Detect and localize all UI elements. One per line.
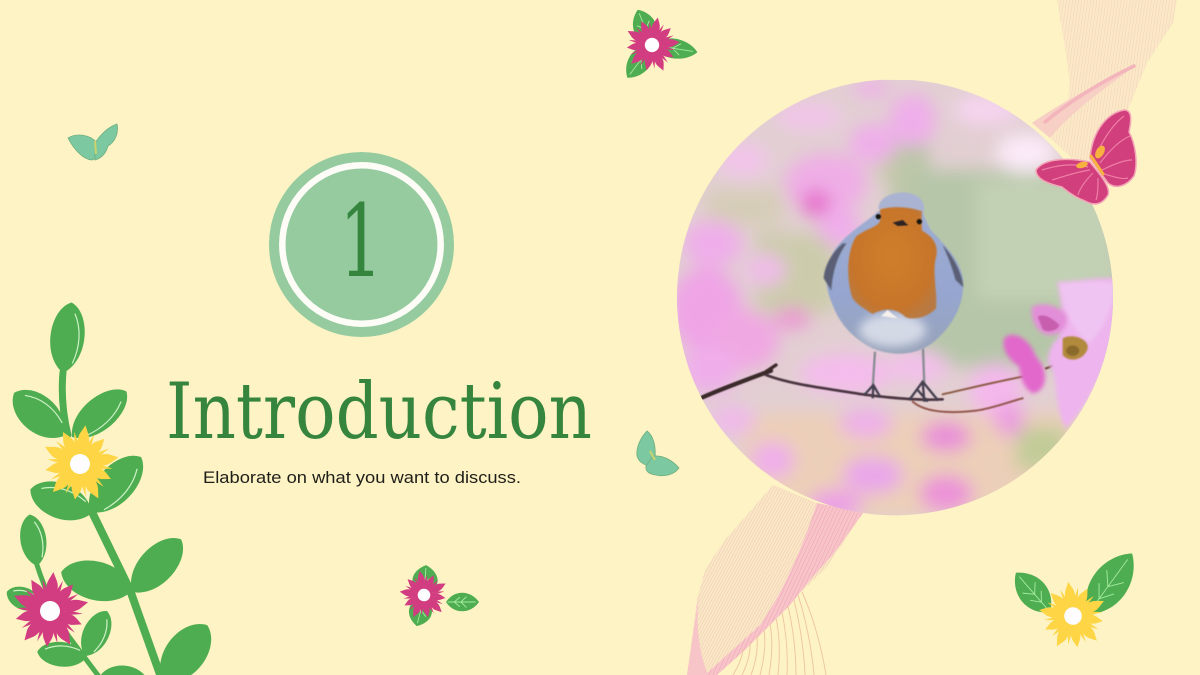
green butterfly center <box>637 431 679 476</box>
leaves <box>46 300 89 375</box>
eyes and beak <box>876 214 922 226</box>
yellow flower <box>37 420 124 505</box>
badge: section number: 1 <box>339 185 383 301</box>
lower right yellow flower <box>1005 543 1147 652</box>
pale belly <box>859 313 926 347</box>
subtitle: Elaborate on what you want to discuss. <box>203 468 521 487</box>
white chest fleck <box>881 310 898 318</box>
top ribbon wave <box>1032 0 1177 175</box>
badge: section number <box>269 152 454 337</box>
photo background <box>676 80 1116 517</box>
robin <box>824 193 963 402</box>
orange breast <box>848 207 937 318</box>
fan lines <box>733 592 826 675</box>
top pink flower <box>619 5 699 84</box>
pink flower <box>8 569 92 650</box>
twigs <box>700 362 1053 414</box>
wing shadows <box>824 243 847 291</box>
bottom ribbon wave <box>687 485 863 675</box>
stems <box>37 372 162 675</box>
photo: robin on a branch <box>669 80 1123 517</box>
pink blossom foreground <box>1004 278 1116 428</box>
legs <box>864 348 938 402</box>
left flowering plant <box>2 300 223 675</box>
title: Introduction <box>166 367 592 457</box>
body <box>824 193 963 354</box>
blurred blossoms <box>669 80 1056 517</box>
green butterfly upper left <box>68 124 118 160</box>
lower pink flower <box>396 564 479 629</box>
pink butterfly <box>1036 110 1136 204</box>
head cap <box>879 193 924 213</box>
